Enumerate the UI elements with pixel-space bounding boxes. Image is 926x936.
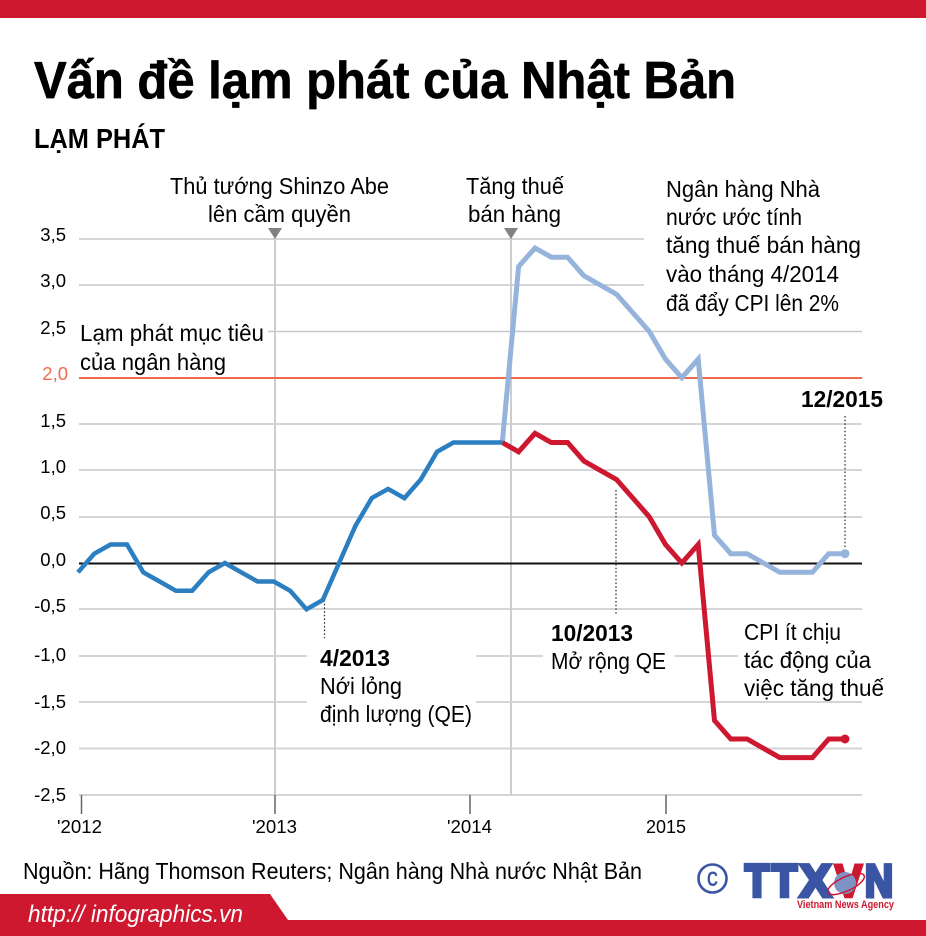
annotation: bank target inflation: Lạm phát mục tiêu [80,320,264,346]
annotation: 4/2013 QE: 4/2013 [320,645,390,671]
logo: TTXVN: T [745,856,769,906]
y axis labels: -1,0 [34,644,66,665]
logo: TTXVN: T [772,856,797,906]
annotation: 12/2015: 12/2015 [801,386,883,412]
chart gridlines [79,239,862,795]
annotation: Shinzo Abe: Thủ tướng Shinzo Abe [170,173,389,199]
x axis labels [57,816,686,837]
line: CPI including tax effect [502,248,850,572]
x axis labels: '2014 [447,816,492,837]
annotation: CPI less affected: tác động của [744,647,872,673]
annotation: CPI less affected: CPI ít chịu [744,619,841,645]
logo: TTXVN: V [835,856,862,906]
annotation: CPI less affected: việc tăng thuế [744,675,884,701]
top red band [0,0,926,18]
y axis labels: -0,5 [34,595,66,616]
annotation: CPI less affected [744,619,884,701]
annotation: 4/2013 QE: Nới lỏng [320,673,402,699]
x axis ticks [82,795,666,814]
title: Vấn đề lạm phát của Nhật Bản [34,52,736,110]
y axis labels: 0,5 [40,502,66,523]
vertical marker: Shinzo Abe [268,228,282,795]
dotted leader lines [324,416,845,638]
source: Nguồn: Hãng Thomson Reuters; Ngân hàng Nhà nước Nhật Bản [23,858,642,884]
annotation: sales tax rise: Tăng thuế [466,173,564,199]
logo: TTXVN: X [800,856,831,906]
y axis labels: -1,5 [34,691,66,712]
y axis labels [34,224,68,805]
annotation: Shinzo Abe: lên cầm quyền [208,201,351,227]
vertical marker: sales tax [504,228,518,795]
y axis labels: 1,5 [40,410,66,431]
annotation: Bank of Japan estimate: nước ước tính [666,204,802,230]
y axis labels: 3,5 [40,224,66,245]
annotation: 4/2013 QE [320,645,472,727]
line: CPI before tax rise [78,442,502,609]
logo: TTXVN: Vietnam News Agency [797,899,895,911]
y axis labels: 3,0 [40,270,66,291]
y axis labels: 2,5 [40,317,66,338]
logo: TTXVN: N [865,856,893,906]
x axis labels: '2013 [252,816,297,837]
annotation: Bank of Japan estimate: tăng thuế bán hàng [666,232,861,258]
annotation: sales tax rise: bán hàng [468,201,561,227]
y axis labels: 0,0 [40,549,66,570]
y axis labels: -2,5 [34,784,66,805]
target inflation line [79,377,862,379]
annotation: bank target inflation: của ngân hàng [80,349,226,375]
icon: copyright [698,864,726,892]
x axis labels: 2015 [646,816,686,837]
annotation: Bank of Japan estimate: vào tháng 4/2014 [666,261,839,287]
annotation: bank target inflation [80,320,264,375]
annotation: Shinzo Abe [170,173,389,227]
subtitle: LẠM PHÁT [34,123,165,154]
annotation: 10/2013 QE expansion: Mở rộng QE [551,648,666,674]
icon: copyright: C [707,868,718,891]
footer red band [0,894,926,936]
annotation: 4/2013 QE: định lượng (QE) [320,701,472,727]
x axis labels: '2012 [57,816,102,837]
annotation: Bank of Japan estimate: đã đẩy CPI lên 2% [666,290,839,316]
logo: TTXVN [745,856,895,911]
zero line [79,562,862,564]
annotation: 10/2013 QE expansion: 10/2013 [551,620,633,646]
annotation: Bank of Japan estimate [666,176,861,316]
line: CPI excluding tax effect [502,433,850,758]
annotation: sales tax rise [466,173,564,227]
y axis labels: 1,0 [40,456,66,477]
footer url: http:// infographics.vn [28,901,243,928]
annotation: 10/2013 QE expansion [551,620,666,674]
y axis labels: 2,0 [42,363,68,384]
annotation: Bank of Japan estimate: Ngân hàng Nhà [666,176,821,202]
y axis labels: -2,0 [34,737,66,758]
